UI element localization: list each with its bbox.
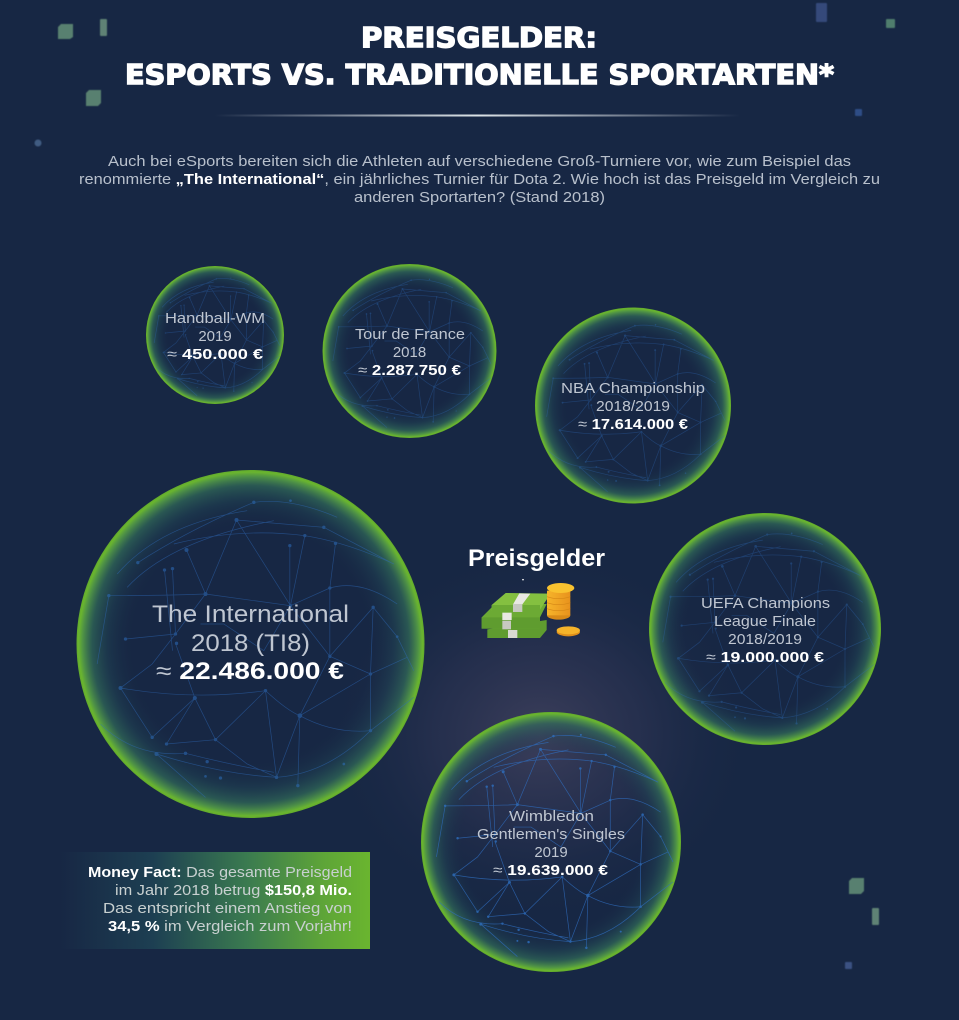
- sphere: The International: ≈ 22.486.000 €: [156, 658, 344, 685]
- sphere: Wimbledon: ≈ 19.639.000 €: [493, 862, 609, 879]
- sphere: NBA Championship: ≈ 17.614.000 €: [578, 416, 689, 433]
- sphere: NBA Championship: NBA Championship: [561, 380, 705, 397]
- sphere: Tour de France: [322, 264, 496, 438]
- callout: money fact: [60, 852, 370, 949]
- sphere: UEFA Champions League: League Finale: [714, 613, 816, 630]
- sphere: Tour de France: Tour de France: [355, 326, 465, 343]
- sphere: Tour de France: 2018: [393, 344, 426, 361]
- sphere: Wimbledon: [421, 712, 681, 972]
- title: ESPORTS VS. TRADITIONELLE SPORTARTEN*: [125, 58, 834, 91]
- sphere: Wimbledon: Gentlemen's Singles: [477, 826, 625, 843]
- intro text: anderen Sportarten? (Stand 2018): [354, 189, 605, 206]
- sphere: UEFA Champions League: 2018/2019: [728, 631, 802, 648]
- sphere: Tour de France: ≈ 2.287.750 €: [358, 362, 462, 379]
- intro text: renommierte „The International“ , ein jährliches Turnier für Dota 2. Wie hoch ist das Preisgeld im Vergleich zu: [79, 171, 880, 188]
- sphere: NBA Championship: 2018/2019: [596, 398, 670, 415]
- sphere: NBA Championship: [535, 308, 731, 504]
- title: [125, 21, 834, 91]
- title divider: [215, 114, 740, 116]
- sphere: Wimbledon: Wimbledon: [509, 808, 594, 825]
- heading: Preisgelder: Preisgelder: [468, 545, 605, 572]
- callout: money fact: 34,5 % im Vergleich zum Vorjahr!: [108, 919, 352, 935]
- sphere: UEFA Champions League: ≈ 19.000.000 €: [706, 649, 825, 666]
- sphere: Handball-WM: 2019: [198, 328, 232, 345]
- intro text: Auch bei eSports bereiten sich die Athleten auf verschiedene Groß-Turniere vor, wie zum Beispiel das: [108, 153, 851, 170]
- icon: money stack and coins: [482, 579, 580, 638]
- intro text: [79, 153, 880, 206]
- sphere: Handball-WM: [146, 266, 284, 404]
- sphere: UEFA Champions League: UEFA Champions: [701, 595, 830, 612]
- callout: money fact: Money Fact: Das gesamte Preisgeld: [88, 865, 352, 881]
- sphere: Wimbledon: 2019: [534, 844, 568, 861]
- sphere: The International: 2018 (TI8): [191, 630, 310, 657]
- sphere: Handball-WM: Handball-WM: [165, 310, 265, 327]
- callout: money fact: im Jahr 2018 betrug $150,8 Mio.: [115, 883, 352, 899]
- sphere: Handball-WM: ≈ 450.000 €: [167, 346, 264, 363]
- sphere: UEFA Champions League: [649, 513, 881, 745]
- sphere: The International: [76, 470, 424, 818]
- title: PREISGELDER:: [361, 21, 597, 54]
- callout: money fact: Das entspricht einem Anstieg von: [103, 901, 352, 917]
- sphere: The International: The International: [152, 601, 349, 628]
